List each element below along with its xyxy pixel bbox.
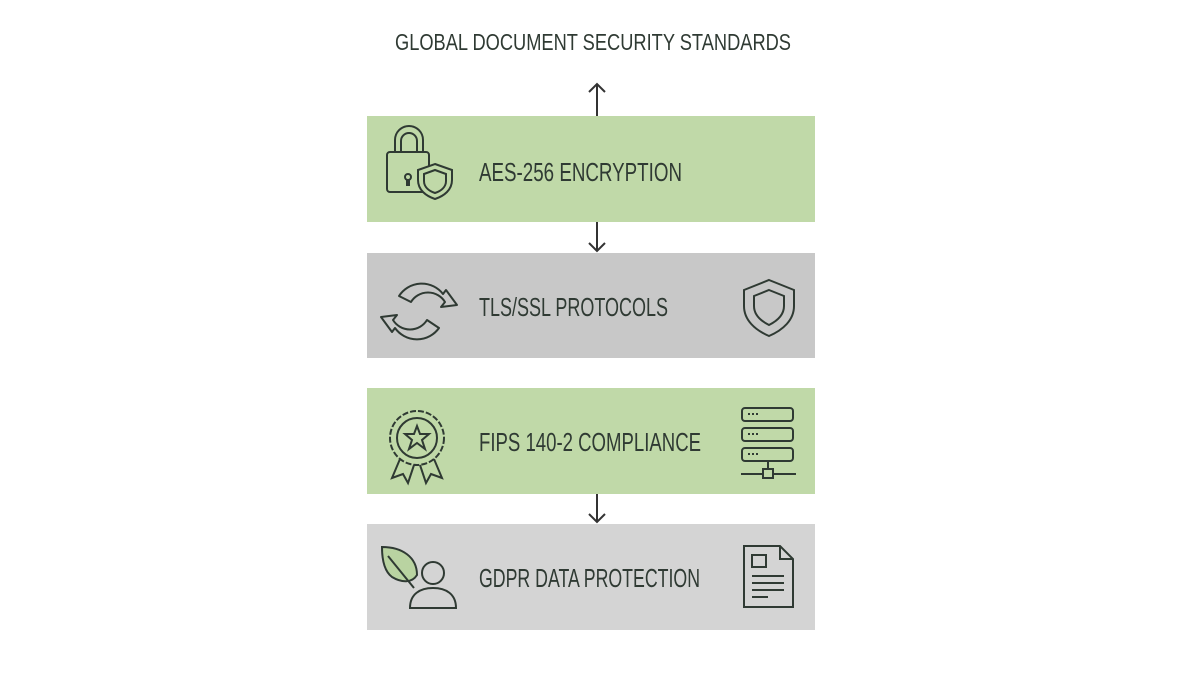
label: FIPS 140-2 COMPLIANCE bbox=[479, 427, 701, 457]
icon: document bbox=[744, 546, 793, 607]
panel: AES-256 encryption bbox=[367, 116, 815, 222]
icon: server bbox=[741, 408, 796, 478]
panel: TLS/SSL protocols bbox=[367, 253, 815, 358]
panel: GDPR data protection bbox=[367, 524, 815, 630]
icon: leaf and person bbox=[382, 547, 456, 608]
panel: FIPS 140-2 compliance bbox=[367, 388, 815, 494]
icon: lock with shield bbox=[387, 126, 452, 199]
label: GDPR DATA PROTECTION bbox=[479, 563, 700, 593]
arrow: down 2 bbox=[589, 494, 605, 522]
title: GLOBAL DOCUMENT SECURITY STANDARDS bbox=[395, 29, 791, 55]
label: AES-256 ENCRYPTION bbox=[479, 157, 682, 187]
icon: shield bbox=[744, 280, 794, 336]
label: TLS/SSL PROTOCOLS bbox=[479, 292, 668, 322]
arrow: down 1 bbox=[589, 222, 605, 251]
arrow: up to title bbox=[589, 84, 605, 116]
icon: award badge bbox=[390, 411, 444, 483]
icon: sync arrows bbox=[381, 284, 457, 339]
